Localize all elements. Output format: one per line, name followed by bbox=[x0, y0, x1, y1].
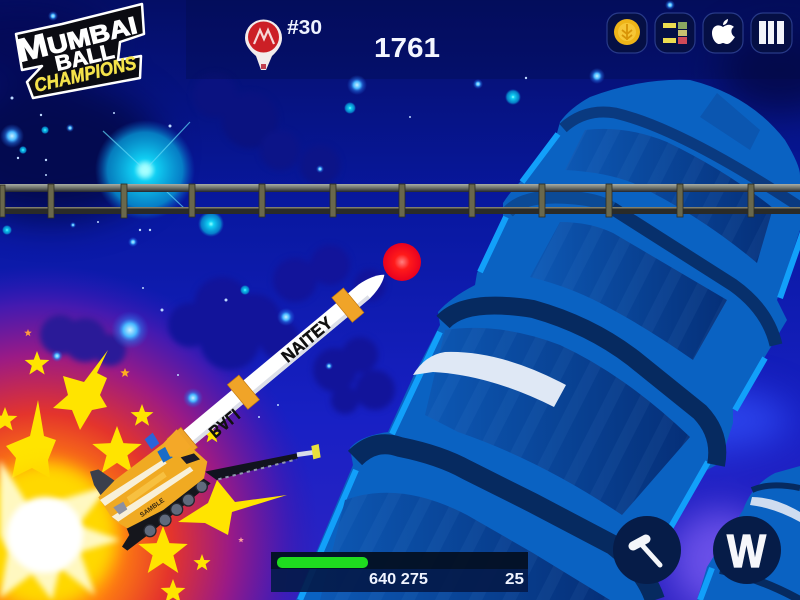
logo: Mumbai Ball Champions bbox=[13, 4, 144, 98]
top-right buttons bbox=[607, 13, 792, 53]
launcher arm bbox=[205, 444, 321, 480]
small second tower bbox=[697, 466, 800, 600]
rail track bbox=[0, 184, 800, 218]
glowing stars bbox=[0, 0, 675, 418]
rocket missile bbox=[165, 262, 398, 465]
rocket label: BALI: BALI bbox=[205, 405, 243, 441]
big cyan star bbox=[95, 120, 195, 220]
explosion burst bbox=[0, 460, 120, 600]
red ball bbox=[383, 243, 421, 281]
tracked launcher vehicle bbox=[90, 429, 321, 551]
progress bar bbox=[277, 557, 368, 568]
explosion and yellow stars bbox=[0, 329, 287, 600]
tracks bbox=[122, 478, 211, 551]
tower silhouette bbox=[296, 80, 800, 600]
apple button bbox=[703, 13, 743, 53]
tower dark bands bbox=[355, 112, 800, 600]
logo backing bbox=[16, 4, 144, 98]
logo word: MUMBAI: MUMBAI bbox=[13, 4, 140, 69]
tower bright edge bbox=[300, 134, 800, 600]
rocket label: NAITEY: NAITEY bbox=[278, 313, 337, 366]
vehicle lettering: SAMBLE bbox=[139, 497, 166, 519]
balloon rank marker bbox=[245, 20, 282, 70]
logo word: BALL: BALL bbox=[53, 40, 117, 76]
score: 1761 bbox=[374, 32, 440, 63]
clouds bbox=[40, 73, 395, 414]
pause button bbox=[751, 13, 792, 53]
tower panels bbox=[320, 93, 773, 600]
rank number: #30 bbox=[287, 17, 322, 39]
tower: large blue cylinder bbox=[296, 80, 800, 600]
distance value: 640 275 bbox=[369, 571, 428, 588]
rocket body bbox=[174, 268, 390, 452]
hammer button bbox=[613, 516, 681, 584]
white stripe on tower bbox=[413, 352, 566, 407]
bottom status panel bbox=[271, 552, 528, 592]
coin button bbox=[607, 13, 647, 53]
W button: W bbox=[727, 525, 767, 577]
top bar shade bbox=[186, 0, 800, 79]
rocket clamps bbox=[165, 288, 364, 461]
logo word: CHAMPIONS: CHAMPIONS bbox=[32, 53, 139, 97]
W button bbox=[713, 516, 781, 584]
menu button bbox=[655, 13, 695, 53]
vehicle body bbox=[98, 429, 207, 528]
tail fin bbox=[90, 469, 116, 497]
count value: 25 bbox=[505, 571, 524, 588]
